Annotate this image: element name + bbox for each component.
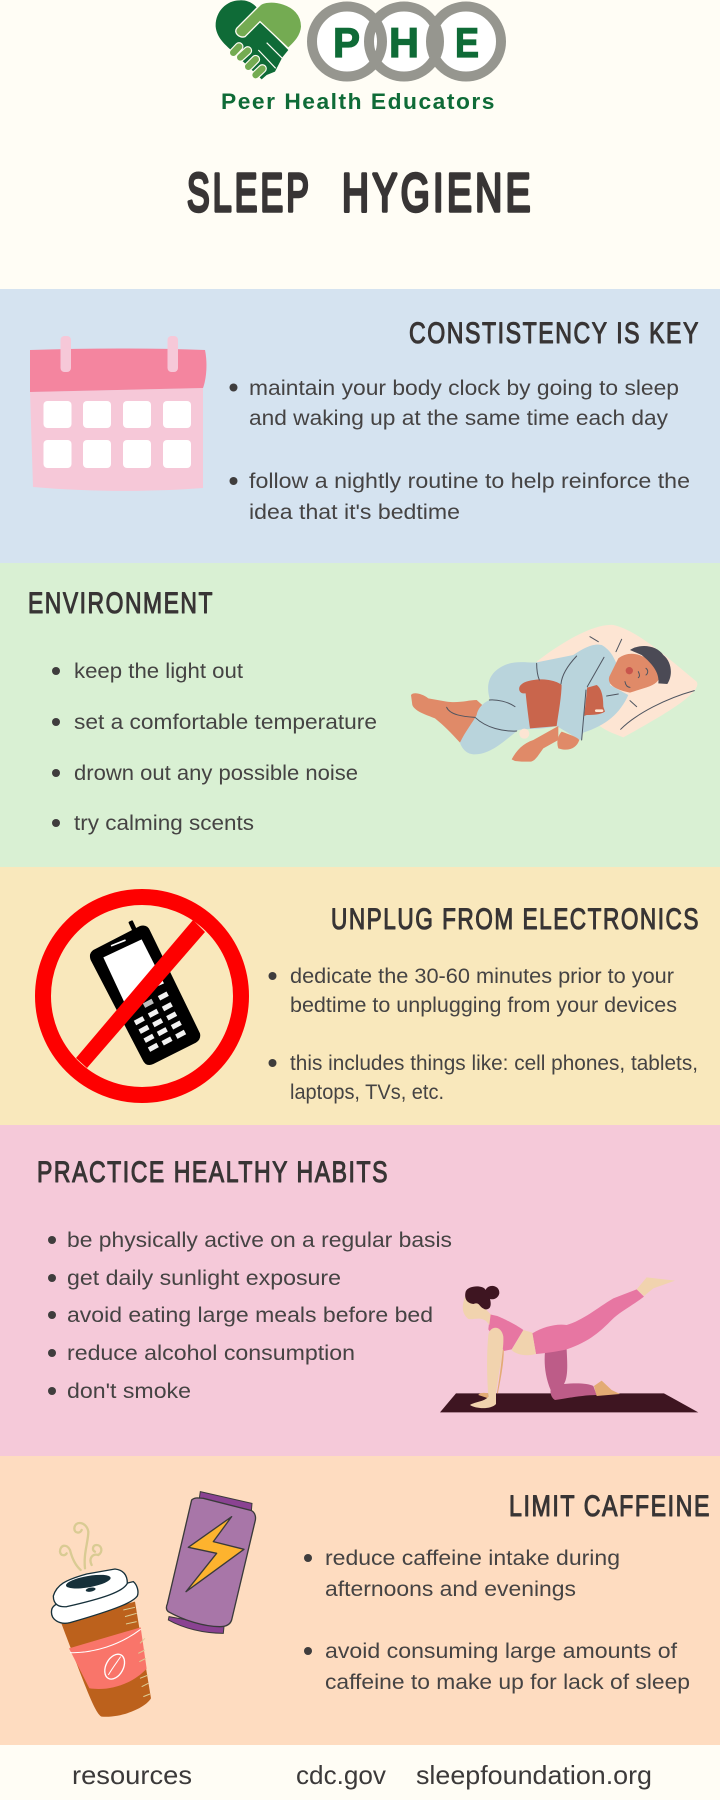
text: caffeine bullets: caffeine to make up for lack of sleep [325, 1671, 690, 1694]
footer: resources: sleepfoundation.org [416, 1760, 652, 1790]
text: caffeine bullets: avoid consuming large amounts of [325, 1640, 677, 1663]
icon: steam [60, 1523, 101, 1570]
text: environment bullets: keep the light out [74, 660, 243, 683]
text: consistency bullets: idea that it's bedtime [249, 501, 460, 524]
text: consistency bullets [230, 377, 690, 524]
text: habits bullets: reduce alcohol consumption [67, 1342, 355, 1365]
panel: consistency is key [0, 289, 720, 563]
text: unplug bullets [268, 965, 698, 1104]
text: habits bullets: avoid eating large meals before bed [67, 1304, 433, 1327]
logo rings with letters PHE: P [333, 19, 360, 66]
title: SLEEP [187, 163, 312, 223]
text: environment bullets: set a comfortable temperature [74, 711, 377, 734]
logo icon: handshake heart [216, 0, 302, 79]
text: consistency bullets: maintain your body clock by going to sleep [249, 377, 679, 400]
title: HYGIENE [342, 163, 534, 223]
logo rings with letters PHE: H [389, 19, 419, 66]
text: unplug bullets: this includes things like: cell phones, tablets, [290, 1052, 698, 1075]
text: unplug bullets: dedicate the 30-60 minutes prior to your [290, 965, 674, 988]
illustration: person sleeping [411, 625, 697, 762]
text: environment bullets: drown out any possible noise [74, 762, 358, 785]
footer: resources: resources [72, 1760, 192, 1790]
text: unplug bullets: laptops, TVs, etc. [290, 1081, 444, 1104]
text: unplug bullets: bedtime to unplugging from your devices [290, 994, 677, 1017]
text: habits bullets [48, 1229, 452, 1403]
text: habits bullets: don't smoke [67, 1380, 191, 1403]
icon: calendar [30, 336, 206, 491]
text: caffeine bullets: afternoons and evenings [325, 1578, 576, 1601]
header: Peer Health Educators logo [216, 0, 501, 114]
panel: limit caffeine [0, 1456, 720, 1745]
text: consistency bullets: and waking up at the same time each day [249, 407, 669, 430]
heading: environment: ENVIRONMENT [28, 587, 214, 620]
text: caffeine bullets: reduce caffeine intake during [325, 1547, 620, 1570]
footer: resources [0, 1745, 720, 1800]
icon: energy drink can [166, 1492, 256, 1633]
title [187, 163, 534, 223]
text: environment bullets: try calming scents [74, 812, 254, 835]
footer: resources: cdc.gov [296, 1760, 386, 1790]
text: environment bullets [52, 660, 377, 835]
illustration: coffee cup and energy can [51, 1492, 256, 1717]
text: consistency bullets: follow a nightly routine to help reinforce the [249, 470, 690, 493]
panel: environment [0, 563, 720, 867]
logo rings with letters PHE [312, 6, 501, 76]
icon: no cell phones sign [43, 897, 241, 1095]
text: habits bullets: be physically active on a regular basis [67, 1229, 452, 1252]
illustration: woman exercising on mat [440, 1277, 698, 1412]
text: habits bullets: get daily sunlight exposure [67, 1267, 341, 1290]
panel: unplug from electronics [0, 867, 720, 1125]
heading: practice healthy habits: PRACTICE HEALTHY HABITS [37, 1156, 389, 1189]
icon: coffee cup [51, 1569, 151, 1717]
logo rings with letters PHE: E [455, 19, 479, 66]
text: caffeine bullets [304, 1547, 690, 1694]
logo wordmark: Peer Health Educators [221, 89, 496, 114]
panel: practice healthy habits [0, 1125, 720, 1456]
